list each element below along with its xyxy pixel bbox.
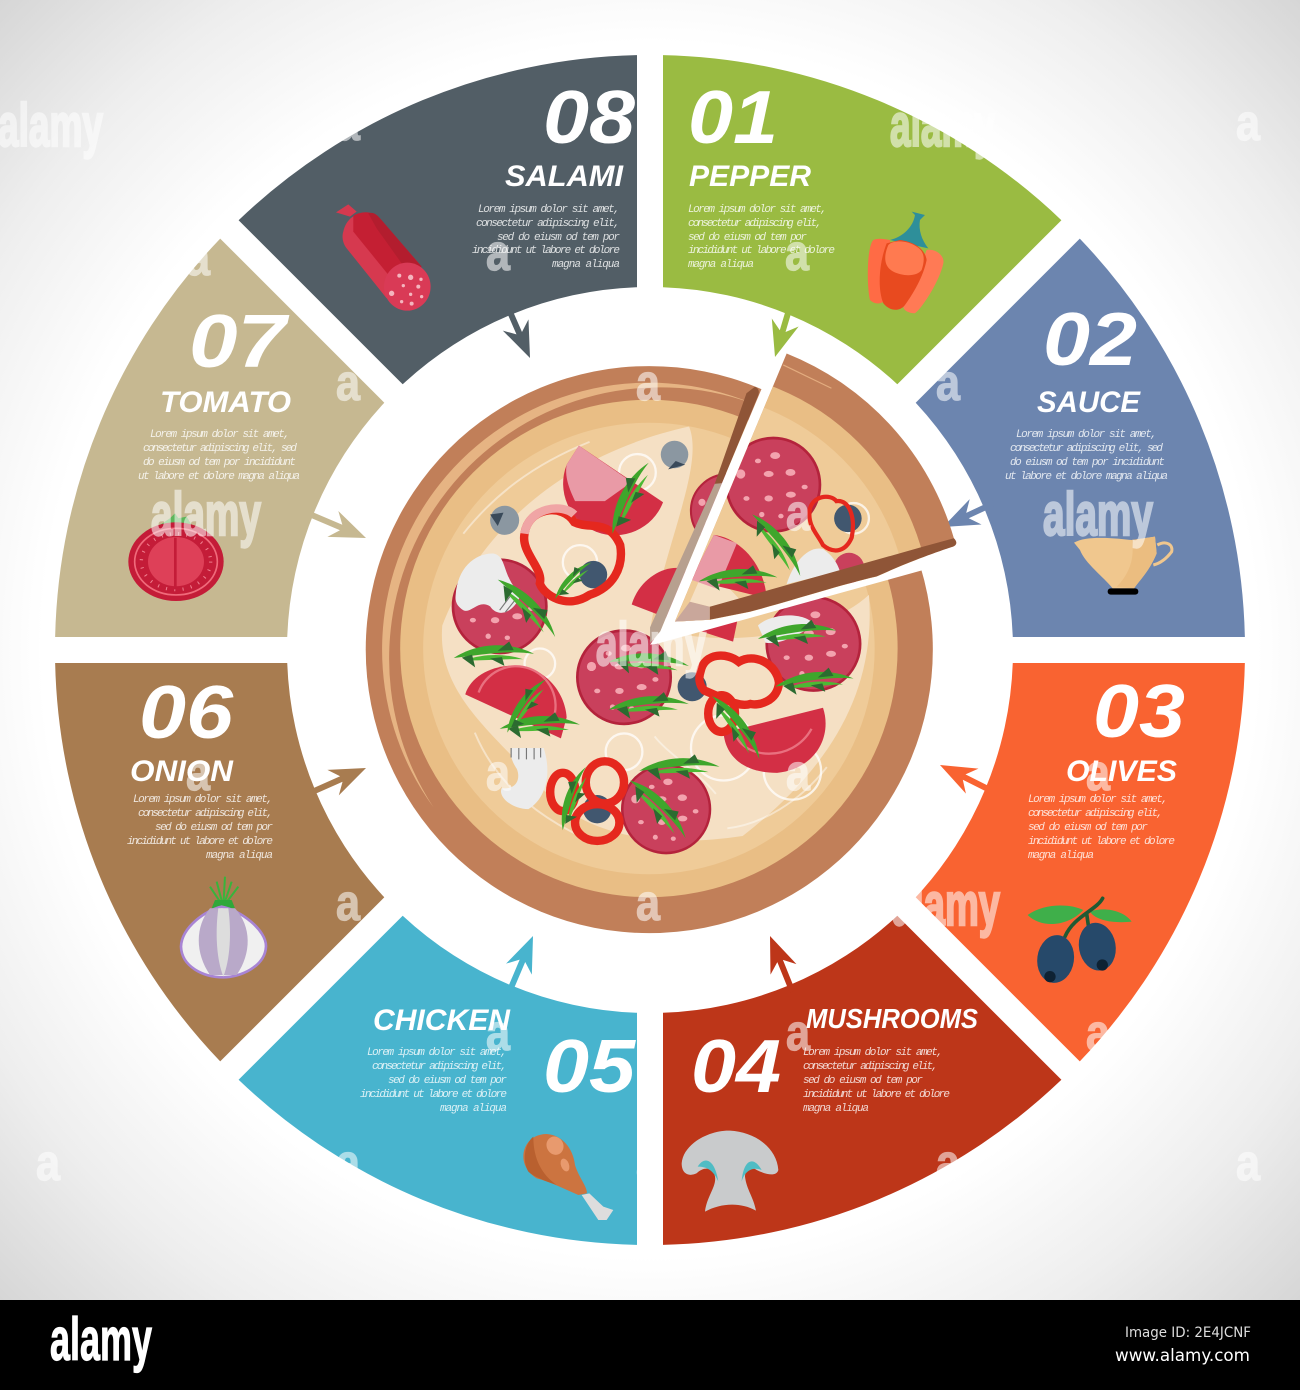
arrow 07	[307, 502, 371, 551]
watermark large marks: alamy	[0, 92, 103, 159]
watermark small marks: a	[486, 1004, 511, 1061]
icon: onion	[181, 877, 266, 977]
panel 05: chicken	[239, 916, 637, 1245]
description 05: consectetur adipiscing elit,	[372, 1061, 507, 1073]
watermark large marks: alamy	[596, 611, 706, 678]
label salami: SALAMI	[505, 160, 624, 193]
label chicken: CHICKEN	[373, 1004, 511, 1037]
number 02: 02	[1043, 297, 1137, 381]
number 06: 06	[139, 670, 234, 754]
description 01	[688, 204, 835, 271]
panel shape 04	[663, 916, 1061, 1245]
olives	[490, 441, 707, 823]
description 08: Lorem ipsum dolor sit amet,	[478, 204, 620, 216]
description 07: Lorem ipsum dolor sit amet,	[150, 429, 290, 441]
panel shape 02	[916, 239, 1245, 637]
description 02: consectetur adipiscing elit, sed	[1010, 443, 1163, 455]
watermark small marks: a	[486, 744, 511, 801]
watermark small marks: a	[1086, 744, 1111, 801]
description 05: incididunt ut labore et dolore	[360, 1089, 507, 1101]
description 07: do eiusm od tem por incididunt	[143, 457, 296, 469]
panel 07: tomato	[55, 239, 384, 637]
footer bar	[0, 1300, 1300, 1390]
site url: www.alamy.com	[1115, 1346, 1250, 1366]
description 03: sed do eiusm od tem por	[1028, 822, 1148, 834]
footer logo: alamy	[50, 1306, 152, 1373]
description 01: sed do eiusm od tem por	[688, 232, 807, 244]
description 08: sed do eiusm od tem por	[497, 232, 620, 244]
watermark small marks: a	[186, 229, 211, 286]
description 05: Lorem ipsum dolor sit amet,	[367, 1047, 507, 1059]
panel 03: olives	[916, 663, 1245, 1061]
slice toppings	[675, 364, 956, 622]
watermark small marks: a	[36, 1134, 61, 1191]
watermark small marks: a	[936, 1134, 961, 1191]
icon: tomato	[128, 513, 224, 601]
panel shape 01	[663, 55, 1061, 384]
icon: mushroom	[682, 1131, 778, 1212]
image id: Image ID: 2E4JCNF	[1125, 1325, 1251, 1341]
basil leaves	[453, 457, 855, 846]
arrow 02	[937, 491, 1000, 540]
watermark large marks: alamy	[151, 481, 261, 548]
arrow 03	[934, 752, 996, 803]
arrow 01	[762, 299, 804, 361]
number 08: 08	[543, 75, 635, 159]
greyed lower cut edge	[650, 483, 722, 643]
watermark small marks: a	[636, 354, 661, 411]
watermark small marks: a	[1086, 1004, 1111, 1061]
number 03: 03	[1093, 669, 1185, 753]
description 02: Lorem ipsum dolor sit amet,	[1016, 429, 1157, 441]
panel shape 08	[239, 55, 637, 384]
main pizza base	[366, 366, 933, 933]
description 08: consectetur adipiscing elit,	[476, 218, 620, 230]
description 03: magna aliqua	[1028, 850, 1094, 862]
watermark small marks: a	[1236, 1134, 1261, 1191]
description 06: magna aliqua	[206, 850, 273, 862]
panel 02: sauce	[916, 239, 1245, 637]
number 04: 04	[691, 1024, 781, 1108]
description 04: magna aliqua	[803, 1103, 869, 1115]
description 01: magna aliqua	[688, 259, 754, 271]
description 02	[1005, 429, 1168, 483]
watermark small marks: a	[785, 224, 810, 281]
description 06: sed do eiusm od tem por	[155, 822, 273, 834]
description 04: consectetur adipiscing elit,	[803, 1061, 938, 1073]
arrow 06	[309, 755, 372, 804]
watermark small marks: a	[936, 354, 961, 411]
description 08	[472, 204, 620, 271]
label mushrooms: MUSHROOMS	[806, 1003, 978, 1034]
description 03	[1028, 794, 1175, 862]
description 04: Lorem ipsum dolor sit amet,	[803, 1047, 943, 1059]
watermark small marks: a	[336, 354, 361, 411]
description 03: Lorem ipsum dolor sit amet,	[1028, 794, 1168, 806]
description 05: sed do eiusm od tem por	[388, 1075, 507, 1087]
description 05	[360, 1047, 507, 1115]
number 05: 05	[543, 1024, 636, 1108]
panel 04: mushrooms	[663, 916, 1061, 1245]
icon: sauce boat	[1074, 537, 1172, 595]
watermark large marks	[0, 92, 1153, 938]
toppings on main pizza	[453, 441, 860, 853]
pizza	[366, 339, 991, 933]
label sauce: SAUCE	[1037, 386, 1141, 419]
watermark small marks: a	[636, 874, 661, 931]
icon: chicken leg	[523, 1134, 613, 1220]
description 01: Lorem ipsum dolor sit amet,	[688, 204, 827, 216]
description 07: consectetur adipiscing elit, sed	[143, 443, 297, 455]
gap around the removed slice	[650, 389, 922, 645]
description 04	[803, 1047, 950, 1115]
panel 08: salami	[239, 55, 637, 384]
watermark small marks	[36, 94, 1261, 1191]
description 03: incididunt ut labore et dolore	[1028, 836, 1175, 848]
label tomato: TOMATO	[160, 386, 291, 419]
watermark small marks: a	[786, 1004, 811, 1061]
icon: bell pepper	[868, 212, 944, 313]
label onion: ONION	[130, 755, 234, 788]
description 06: incididunt ut labore et dolore	[127, 836, 273, 848]
description 06	[127, 794, 273, 862]
label pepper: PEPPER	[689, 160, 811, 193]
description 01: consectetur adipiscing elit,	[688, 218, 822, 230]
onion rings	[525, 454, 821, 800]
description 02: do eiusm od tem por incididunt	[1010, 457, 1165, 469]
description 01: incididunt ut labore et dolore	[688, 245, 835, 257]
watermark small marks: a	[636, 1134, 661, 1191]
description 05: magna aliqua	[440, 1103, 507, 1115]
slice crust	[675, 353, 956, 622]
description 04: sed do eiusm od tem por	[803, 1075, 923, 1087]
arrow 05	[497, 931, 546, 997]
watermark small marks: a	[336, 874, 361, 931]
description 03: consectetur adipiscing elit,	[1028, 808, 1163, 820]
red pepper rings	[524, 510, 779, 841]
watermark small marks: a	[786, 484, 811, 541]
description 04: incididunt ut labore et dolore	[803, 1089, 950, 1101]
description 08: magna aliqua	[552, 259, 620, 271]
description 07	[138, 429, 300, 483]
panel 06: onion	[55, 663, 384, 1061]
panel 01: pepper	[663, 55, 1061, 384]
watermark small marks: a	[336, 94, 361, 151]
description 07: ut labore et dolore magna aliqua	[138, 471, 300, 483]
mushroom gills	[500, 595, 541, 759]
watermark small marks: a	[786, 744, 811, 801]
number 01: 01	[688, 75, 778, 159]
description 02: ut labore et dolore magna aliqua	[1005, 471, 1168, 483]
watermark small marks: a	[186, 744, 211, 801]
tomato slices	[465, 446, 826, 773]
watermark large marks: alamy	[1043, 481, 1153, 548]
description 06: consectetur adipiscing elit,	[138, 808, 273, 820]
mushrooms	[456, 554, 815, 809]
panel shape 07	[55, 239, 384, 637]
arrow 04	[757, 931, 805, 997]
watermark small marks: a	[486, 224, 511, 281]
icon: salami	[336, 204, 431, 311]
description 08: incididunt ut labore et dolore	[472, 245, 620, 257]
panel shape 06	[55, 663, 384, 1061]
panel shape 03	[916, 663, 1245, 1061]
cut edge of pizza	[715, 387, 759, 484]
description 06: Lorem ipsum dolor sit amet,	[133, 794, 273, 806]
label olives: OLIVES	[1066, 755, 1177, 788]
watermark small marks: a	[1236, 94, 1261, 151]
icon: olives	[1028, 898, 1132, 985]
panel shape 05	[239, 916, 637, 1245]
watermarks	[0, 92, 1261, 1191]
watermark large marks: alamy	[892, 871, 1000, 938]
number 07: 07	[189, 299, 290, 383]
watermark small marks: a	[336, 1134, 361, 1191]
arrow 08	[495, 301, 543, 364]
lifted pizza slice	[675, 354, 956, 622]
salami slices	[453, 474, 860, 853]
watermark large marks: alamy	[890, 92, 995, 159]
